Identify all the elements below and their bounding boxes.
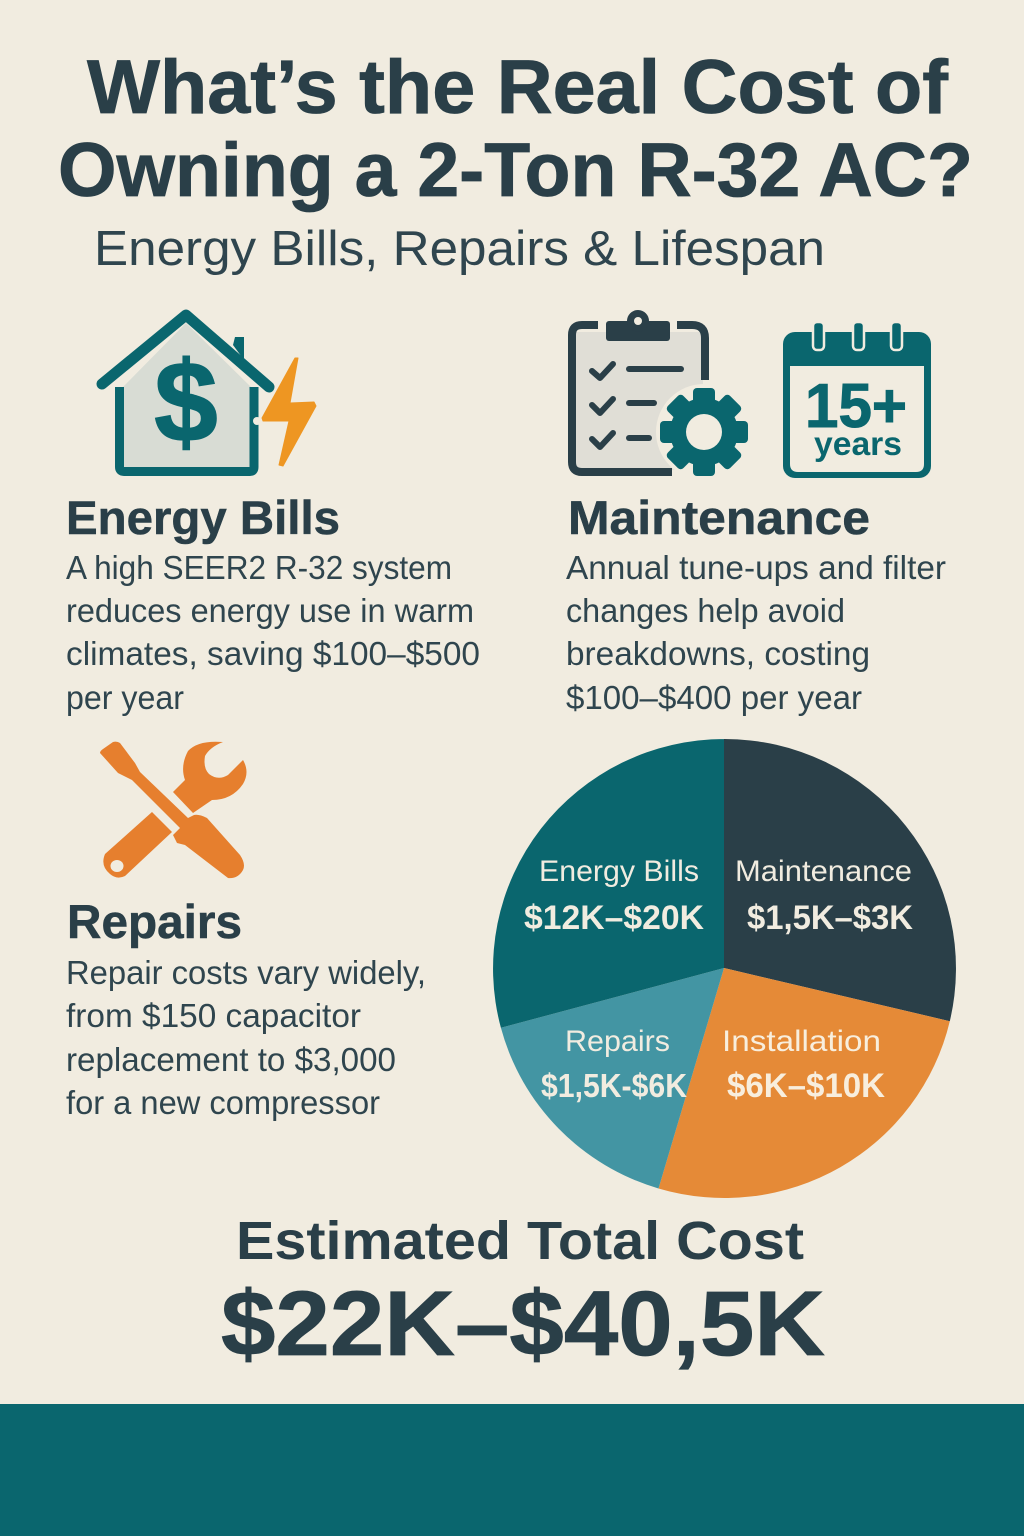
slice: repairs xyxy=(501,968,724,1188)
text: repairs description: from $150 capacitor xyxy=(66,997,361,1034)
label: maintenance: $1,5K–$3K xyxy=(747,899,913,937)
label: maintenance xyxy=(735,855,913,937)
icon: house with dollar and lightning bolt: $ xyxy=(154,339,218,466)
icon: gear xyxy=(656,384,752,480)
title xyxy=(58,45,973,213)
label: installation: Installation xyxy=(722,1025,881,1058)
heading: energy bills: Energy Bills xyxy=(66,491,340,544)
text: repairs description: for a new compressor xyxy=(66,1084,380,1121)
text: maintenance description: changes help avoid xyxy=(566,592,845,629)
slice: maintenance xyxy=(724,739,956,1021)
icon: calendar 15+ years xyxy=(783,322,931,478)
text: maintenance description: Annual tune-ups and filter xyxy=(566,549,946,586)
label: repairs xyxy=(541,1025,687,1104)
text: energy bills description xyxy=(66,549,480,716)
title: Owning a 2-Ton R-32 AC? xyxy=(58,128,973,213)
label: installation: $6K–$10K xyxy=(727,1067,885,1105)
slice: energy bills xyxy=(493,739,724,1028)
subtitle: Energy Bills, Repairs & Lifespan xyxy=(94,222,825,276)
label: installation xyxy=(722,1025,885,1105)
text: energy bills description: A high SEER2 R-32 system xyxy=(66,549,452,586)
text: maintenance description: breakdowns, costing xyxy=(566,635,870,672)
title: What’s the Real Cost of xyxy=(87,45,949,130)
label: energy bills xyxy=(524,855,704,937)
heading: repairs: Repairs xyxy=(67,895,242,948)
icon: house with dollar and lightning bolt xyxy=(102,315,316,472)
text: energy bills description: reduces energy use in warm xyxy=(66,592,474,629)
text: energy bills description: per year xyxy=(66,679,184,716)
label: energy bills: $12K–$20K xyxy=(524,899,704,937)
label: maintenance: Maintenance xyxy=(735,855,912,888)
label: energy bills: Energy Bills xyxy=(539,855,699,888)
heading: estimated total cost: Estimated Total Cost xyxy=(236,1211,804,1271)
label: repairs: Repairs xyxy=(565,1025,670,1058)
icon: crossed wrench and screwdriver xyxy=(100,742,246,878)
text: energy bills description: climates, saving $100–$500 xyxy=(66,635,480,672)
icon: clipboard checklist with gear xyxy=(572,310,752,480)
text: repairs description: replacement to $3,000 xyxy=(66,1041,396,1078)
total cost figure: $22K–$40,5K xyxy=(221,1273,825,1375)
text: repairs description: Repair costs vary widely, xyxy=(66,954,426,991)
pie chart: cost breakdown xyxy=(493,739,956,1198)
icon: calendar 15+ years: 15+ xyxy=(805,372,907,441)
heading: maintenance: Maintenance xyxy=(568,491,870,544)
icon: calendar 15+ years: years xyxy=(814,425,902,462)
text: repairs description xyxy=(66,954,426,1121)
text: maintenance description: $100–$400 per year xyxy=(566,679,862,716)
footer band xyxy=(0,1404,1024,1536)
slice: installation xyxy=(658,968,950,1198)
text: maintenance description xyxy=(566,549,946,716)
label: repairs: $1,5K-$6K xyxy=(541,1067,687,1104)
